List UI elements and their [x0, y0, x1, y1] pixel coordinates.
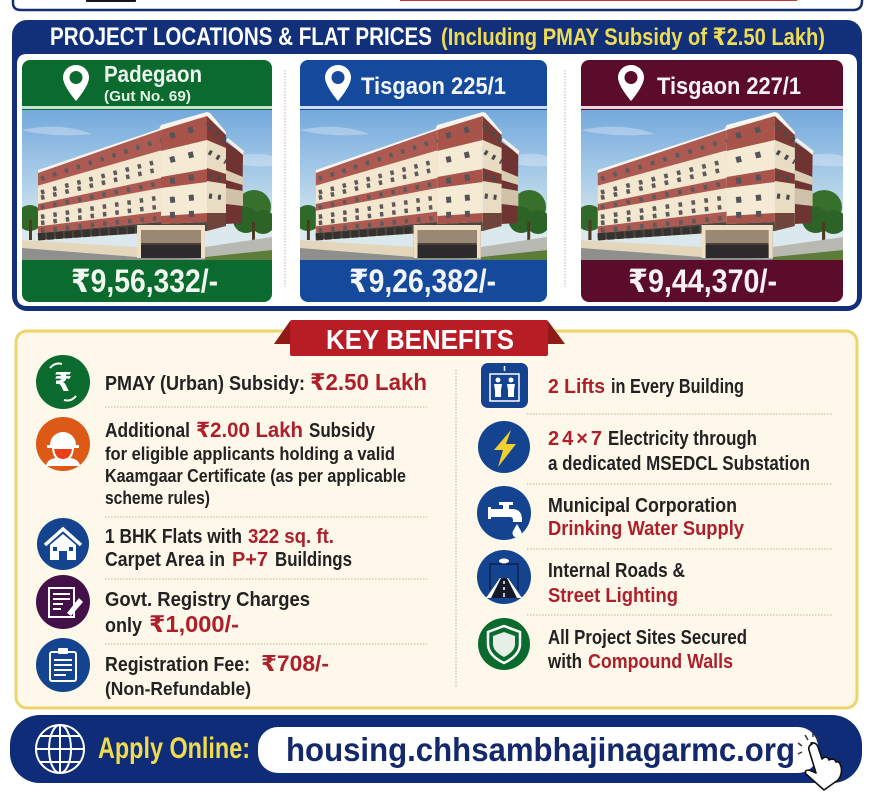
location name: Tisgaon 225/1 — [361, 73, 506, 100]
text — [105, 369, 427, 395]
image: apartment building — [295, 110, 550, 260]
text: 24×7 — [548, 428, 602, 450]
text — [105, 651, 329, 699]
icon: lift — [481, 363, 528, 408]
text: 2 Lifts — [548, 376, 605, 398]
icon: lightning — [478, 421, 530, 473]
text — [548, 495, 745, 540]
card: Tisgaon 225/1 — [295, 60, 550, 302]
text: (Non-Refundable) — [105, 679, 251, 699]
icon: globe — [36, 725, 84, 773]
price: ₹9,56,332/- — [71, 263, 218, 299]
icon: tap — [477, 486, 531, 540]
icon: shield — [478, 618, 530, 670]
image: apartment building — [576, 110, 846, 260]
text: only — [105, 615, 143, 637]
icon: location pin — [63, 65, 89, 101]
location name: Padegaon — [104, 61, 202, 87]
text: scheme rules) — [105, 488, 210, 508]
card: Tisgaon 227/1 — [576, 60, 846, 302]
text — [105, 419, 406, 508]
icon: clipboard — [36, 638, 90, 692]
price: ₹9,44,370/- — [628, 263, 777, 299]
text: Additional — [105, 420, 190, 442]
text: ₹2.00 Lakh — [196, 419, 303, 442]
benefit: electricity — [478, 421, 810, 475]
benefit: 1 BHK flats — [37, 518, 352, 571]
text: Buildings — [275, 549, 352, 571]
text: Street Lighting — [548, 585, 678, 607]
location name — [104, 61, 202, 105]
image: apartment building — [17, 110, 275, 260]
location name: Tisgaon 227/1 — [657, 73, 801, 100]
price: ₹9,26,382/- — [349, 263, 496, 299]
text: with — [547, 651, 582, 673]
text: Compound Walls — [588, 651, 733, 673]
text: Electricity through — [608, 428, 757, 450]
text: Carpet Area in — [105, 549, 225, 571]
text: Municipal Corporation — [548, 495, 737, 517]
label: apply online: Apply Online: — [98, 732, 250, 765]
text: Subsidy — [309, 420, 376, 442]
text: All Project Sites Secured — [548, 627, 747, 649]
url pill: housing.chhsambhajinagarmc.org — [286, 731, 795, 768]
benefit: lifts — [481, 363, 744, 408]
icon: house — [37, 518, 89, 570]
text — [105, 589, 310, 637]
benefit: roads and lighting — [477, 550, 685, 607]
text: Kaamgaar Certificate (as per applicable — [105, 466, 406, 486]
ribbon heading: key benefits — [274, 320, 565, 356]
panel: key benefits — [16, 320, 857, 708]
text: a dedicated MSEDCL Substation — [548, 453, 810, 475]
text: in Every Building — [611, 376, 744, 398]
icon: pointing hand — [798, 731, 842, 790]
location name: (Gut No. 69) — [104, 89, 191, 105]
text: ₹1,000/- — [149, 611, 239, 637]
text: PMAY (Urban) Subsidy: — [105, 373, 305, 395]
text: ₹708/- — [261, 651, 329, 676]
text — [548, 560, 685, 607]
text: 1 BHK Flats with — [105, 526, 242, 548]
text — [548, 428, 810, 475]
benefit: drinking water — [477, 486, 745, 540]
panel: project locations and flat prices — [12, 20, 862, 311]
footer bar: apply online — [10, 715, 862, 790]
text: for eligible applicants holding a valid — [105, 444, 395, 464]
text — [547, 627, 747, 673]
icon: rupee — [36, 355, 90, 409]
icon: document with pen — [36, 575, 90, 629]
heading: project locations: PROJECT LOCATIONS & FLAT PRICES — [50, 23, 432, 51]
benefit: additional subsidy — [36, 417, 406, 508]
card: Padegaon — [17, 60, 275, 302]
text: P+7 — [232, 549, 268, 571]
icon: worker — [36, 417, 90, 471]
text: Internal Roads & — [548, 560, 685, 582]
benefit: PMAY subsidy — [36, 355, 427, 409]
text — [105, 526, 352, 571]
text: 322 sq. ft. — [248, 526, 334, 548]
benefit: compound walls — [478, 618, 747, 673]
text: Govt. Registry Charges — [105, 589, 310, 611]
icon: road with street lights — [477, 550, 531, 604]
icon: rupee: ₹ — [54, 367, 72, 397]
heading: project locations — [50, 23, 825, 51]
text: ₹2.50 Lakh — [310, 369, 427, 395]
text: Drinking Water Supply — [548, 518, 745, 540]
icon: location pin — [618, 65, 644, 101]
text — [548, 376, 744, 398]
benefit: registration fee — [36, 638, 329, 699]
top panel remnant — [13, 0, 862, 10]
icon: location pin — [325, 65, 351, 101]
text: Registration Fee: — [105, 654, 250, 676]
benefit: registry charges — [36, 575, 310, 637]
ribbon heading: key benefits: KEY BENEFITS — [326, 324, 514, 355]
